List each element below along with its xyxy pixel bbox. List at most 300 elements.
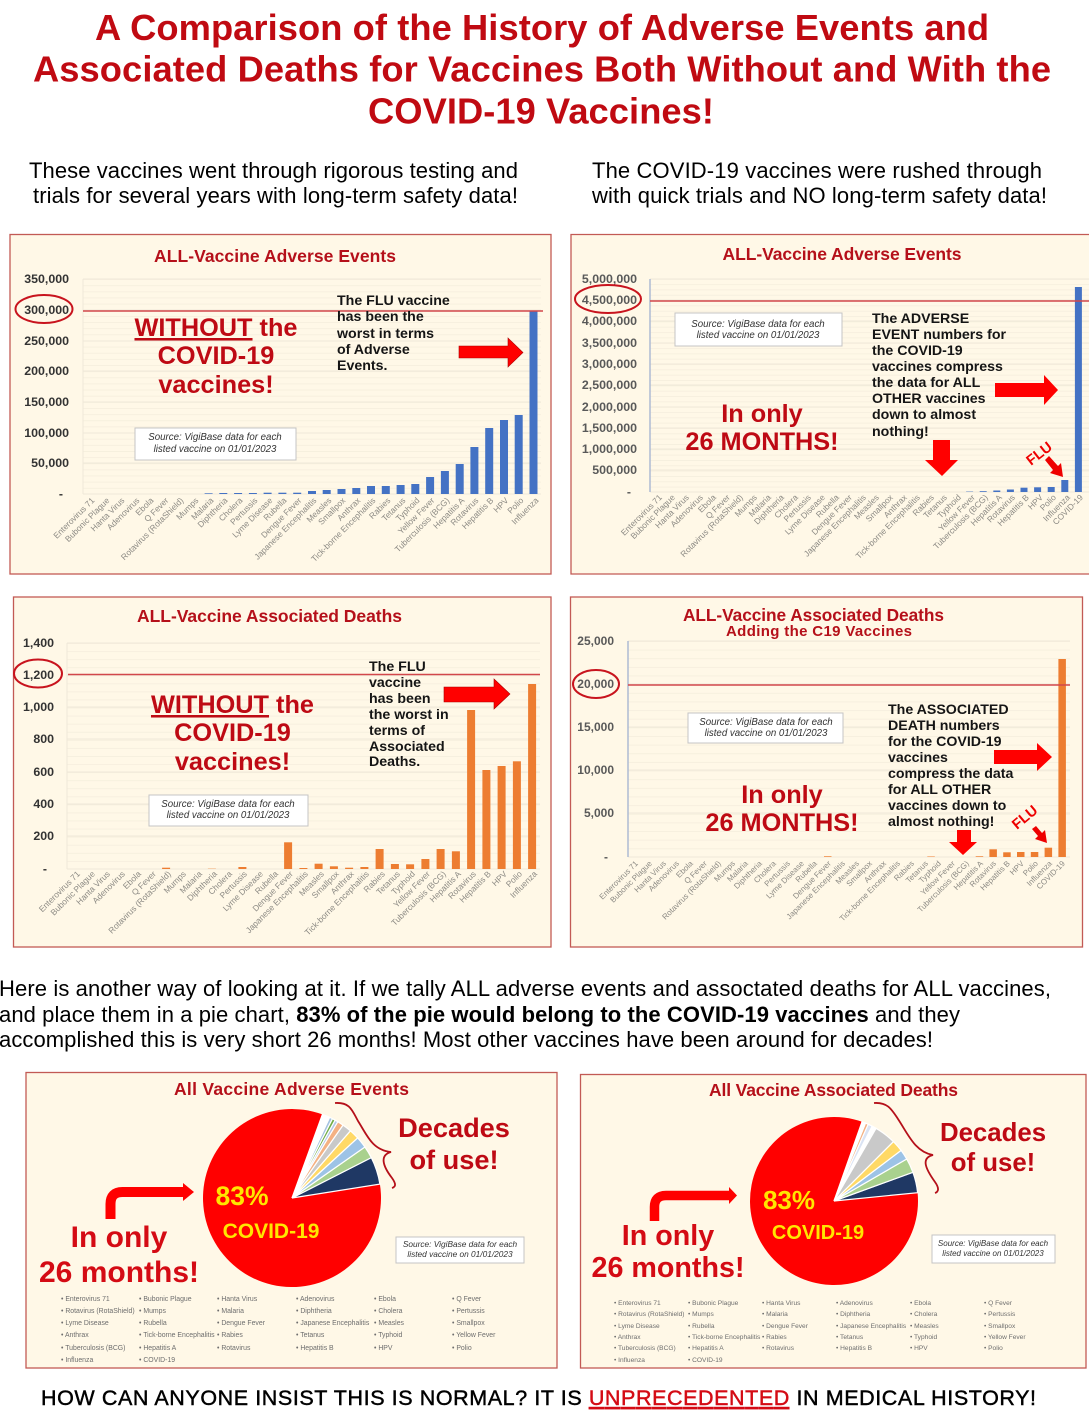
category labels: Hepatitis A — [969, 492, 1004, 528]
brace — [335, 1103, 395, 1188]
category labels: Polio — [1021, 859, 1040, 878]
category labels: Pertussis — [217, 869, 249, 900]
pie chart — [750, 1117, 918, 1285]
source box — [932, 1235, 1055, 1263]
circled 4,500,000 — [575, 285, 641, 313]
legend: • Diphtheria — [836, 1311, 871, 1318]
category labels: Dengue Fever — [791, 859, 833, 901]
panel: pie chart associated deaths — [580, 1074, 1086, 1368]
category labels: Lyme Disease — [764, 859, 806, 901]
title: COVID-19 Vaccines! — [368, 90, 714, 132]
category labels: COVID-19 — [1051, 492, 1085, 527]
legend: • Cholera — [374, 1308, 403, 1315]
category labels: Tetanus — [921, 492, 949, 520]
paragraph: another way of looking at it — [0, 976, 1051, 1052]
note: flu vaccine deaths: has been — [369, 691, 431, 707]
note: associated death numbers: compress the data — [888, 766, 1013, 782]
category labels: Typhoid — [394, 495, 422, 523]
legend: • Dengue Fever — [762, 1323, 809, 1330]
category labels: Hepatitis A — [428, 869, 463, 904]
legend: • Hanta Virus — [762, 1300, 801, 1307]
callout: in only 26 months: 26 months! — [39, 1256, 199, 1289]
callout: without COVID-19: vaccines! — [158, 371, 274, 399]
legend: • Yellow Fever — [452, 1332, 496, 1339]
category labels: Anthrax — [328, 868, 356, 896]
legend: • COVID-19 — [688, 1357, 723, 1364]
legend: • Hepatitis A — [688, 1345, 724, 1352]
category labels: Hepatitis B — [979, 859, 1012, 892]
category labels: Smallpox — [309, 868, 341, 900]
y axis labels: 1,500,000 — [582, 421, 637, 435]
legend: • Rabies — [217, 1332, 243, 1339]
y axis labels: - — [627, 485, 631, 499]
paragraph: another way of looking at it: Here is another way of looking at it. If we tally ALL adverse events and assoctated deaths for ALL vaccines, — [0, 976, 1051, 1001]
category labels: Malaria — [189, 495, 216, 522]
category labels: Ebola — [696, 492, 718, 515]
legend: • Pertussis — [452, 1308, 485, 1315]
y axis labels: 5,000 — [584, 806, 614, 820]
reference line at 20,000 — [628, 684, 1070, 686]
intro text: COVID-19 vaccines: The COVID-19 vaccines were rushed through — [592, 158, 1042, 183]
arrow: down to other vaccines — [925, 440, 958, 476]
category labels — [51, 495, 541, 564]
note: flu vaccine deaths — [369, 659, 449, 770]
category labels: Rotavirus (RotaShield) — [660, 859, 723, 922]
category labels: Measles — [852, 492, 881, 521]
legend: • Hepatitis A — [139, 1345, 177, 1352]
category labels: Measles — [304, 495, 333, 524]
y axis labels — [577, 634, 614, 864]
reference line at 300,000 — [83, 310, 543, 312]
intro text: other vaccines: These vaccines went through rigorous testing and — [29, 158, 518, 183]
chart heading: All Vaccine Associated Deaths — [709, 1080, 958, 1100]
category labels: HPV — [1008, 859, 1026, 877]
legend: • Rabies — [762, 1334, 787, 1341]
category labels: Mumps — [174, 495, 200, 522]
note: associated death numbers: vaccines — [888, 750, 948, 766]
category labels: Cholera — [217, 495, 245, 523]
y axis labels: 20,000 — [577, 677, 614, 691]
category labels: Influenza — [1041, 492, 1072, 523]
legend: • Anthrax — [61, 1332, 89, 1339]
chart heading: Adding the C19 Vaccines — [726, 623, 912, 640]
y axis labels: 4,500,000 — [582, 293, 637, 307]
legend: • Malaria — [762, 1311, 788, 1318]
legend: • Tetanus — [296, 1332, 325, 1339]
source box: Source: VigiBase data for each — [691, 319, 825, 330]
category labels: Diphtheria — [185, 869, 219, 903]
category labels — [619, 492, 1085, 561]
note: associated death numbers — [888, 702, 1013, 830]
legend: • COVID-19 — [139, 1357, 175, 1364]
category labels: Tuberculosis (BCG) — [393, 495, 452, 554]
callout: in only 26 months: In only — [721, 400, 803, 428]
legend: • Polio — [452, 1345, 472, 1352]
legend: • Typhoid — [374, 1332, 403, 1339]
bar chart: adverse events — [205, 311, 538, 494]
y axis labels: 150,000 — [24, 395, 69, 409]
y axis labels: 100,000 — [24, 426, 69, 440]
category labels: Measles — [834, 859, 861, 886]
y axis labels: 600 — [33, 765, 54, 779]
legend: • Anthrax — [614, 1334, 641, 1341]
reference line at 1,200 — [68, 674, 540, 676]
title: A Comparison of the History of Adverse Events and — [95, 7, 989, 48]
category labels: Mumps — [732, 492, 759, 519]
y axis labels: 1,400 — [23, 636, 54, 650]
grid — [67, 643, 540, 869]
y axis labels: 25,000 — [577, 634, 614, 648]
callout: without COVID-19: WITHOUT the — [134, 314, 298, 342]
category labels: Tuberculosis (BCG) — [931, 492, 990, 551]
y axis labels: - — [43, 862, 47, 876]
category labels: Rubella — [794, 859, 819, 884]
category labels: HPV — [1026, 492, 1045, 512]
note: flu vaccine deaths: the worst in — [369, 707, 449, 723]
note: adverse event numbers: OTHER vaccines — [872, 391, 986, 407]
category labels: Bubonic Plague — [628, 492, 677, 541]
legend: • Lyme Disease — [614, 1323, 660, 1330]
callout: in only 26 months: In only — [71, 1221, 168, 1254]
category labels: Diphtheria — [195, 495, 230, 529]
callout: decades of use: of use! — [951, 1149, 1035, 1177]
chart heading: ALL-Vaccine Adverse Events — [154, 246, 396, 266]
callout: without COVID-19 — [134, 314, 298, 399]
legend: • Adenovirus — [836, 1300, 873, 1307]
legend: • Dengue Fever — [217, 1320, 266, 1327]
grid — [628, 641, 1070, 857]
note: flu vaccine deaths: Deaths. — [369, 754, 420, 770]
category labels: Rubella — [814, 492, 841, 520]
category labels: Pertussis — [763, 859, 792, 888]
category labels: Q Fever — [142, 495, 171, 524]
category labels: Ebola — [674, 859, 695, 880]
category labels: Tick-borne Encephalitis — [838, 859, 902, 923]
category labels: Polio — [504, 869, 524, 889]
note: associated death numbers: DEATH numbers — [888, 718, 1000, 734]
y axis labels: 3,500,000 — [582, 336, 637, 350]
category labels: Japanese Encephalitis — [244, 869, 310, 935]
note: associated death numbers: vaccines down to — [888, 798, 1007, 814]
legend: • Enterovirus 71 — [614, 1300, 661, 1307]
source box: Source: VigiBase data for each — [148, 432, 282, 443]
note: adverse event numbers: vaccines compress — [872, 359, 1003, 375]
legend: • Q Fever — [452, 1296, 482, 1303]
source box — [135, 428, 296, 460]
bent arrow to pie — [654, 1187, 737, 1221]
legend: • Adenovirus — [296, 1296, 335, 1303]
note: flu vaccine: worst in terms — [336, 326, 434, 342]
category labels: Anthrax — [862, 859, 888, 885]
callout: in only 26 months: 26 MONTHS! — [685, 428, 839, 456]
source box — [688, 713, 843, 743]
source box — [396, 1237, 524, 1263]
category labels: Polio — [505, 495, 526, 516]
y axis labels: 50,000 — [31, 456, 69, 470]
note: flu vaccine: has been the — [337, 309, 424, 325]
legend: • Enterovirus 71 — [61, 1296, 110, 1303]
y axis labels: 200 — [33, 829, 54, 843]
legend: • Japanese Encephalitis — [296, 1320, 370, 1327]
callout: in only 26 months — [705, 781, 859, 837]
legend: • Diphtheria — [296, 1308, 332, 1315]
y axis labels: 5,000,000 — [582, 272, 637, 286]
legend: • Mumps — [139, 1308, 166, 1315]
category labels: Cholera — [772, 492, 800, 520]
y axis labels: 250,000 — [24, 334, 69, 348]
y axis labels: 1,000,000 — [582, 442, 637, 456]
y axis labels: 10,000 — [577, 763, 614, 777]
source box: Source: VigiBase data for each — [161, 799, 295, 810]
category labels: Dengue Fever — [809, 492, 854, 537]
category labels: Tetanus — [904, 859, 930, 885]
category labels: Rotavirus (RotaShield) — [678, 492, 745, 559]
category labels: Smallpox — [316, 495, 348, 527]
pie label: COVID-19: COVID-19 — [223, 1220, 319, 1243]
panel: associated deaths with COVID-19 — [570, 597, 1082, 947]
source box: Source: VigiBase data for each — [938, 1239, 1049, 1248]
pie label: 83%: 83% — [763, 1185, 815, 1215]
note: adverse event numbers: the COVID-19 — [872, 343, 963, 359]
source box — [149, 795, 308, 826]
category labels — [37, 868, 539, 937]
category labels: Polio — [1038, 492, 1058, 513]
y axis labels: 2,500,000 — [582, 378, 637, 392]
legend: • HPV — [374, 1345, 393, 1352]
category labels: Tick-borne Encephalitis — [303, 869, 371, 937]
category labels: Rubella — [261, 495, 289, 523]
category labels: Anthrax — [335, 495, 363, 523]
legend: • Yellow Fever — [984, 1334, 1026, 1341]
category labels: Rotavirus (RotaShield) — [106, 869, 173, 935]
category labels: Hanta Virus — [632, 859, 668, 894]
y axis labels: 400 — [33, 797, 54, 811]
panel: pie chart adverse events — [26, 1072, 557, 1368]
pie chart — [203, 1109, 381, 1287]
category labels: Tuberculosis (BCG) — [389, 869, 448, 928]
callout: decades of use: Decades — [398, 1112, 510, 1143]
category labels: Adenovirus — [90, 869, 127, 906]
pie label: COVID-19: COVID-19 — [772, 1222, 864, 1244]
category labels: Yellow Fever — [391, 869, 432, 910]
y axis labels: 350,000 — [24, 272, 69, 286]
bar chart: associated deaths with COVID-19 — [824, 659, 1066, 857]
category labels: Rabies — [892, 859, 916, 883]
note: flu vaccine: of Adverse — [337, 342, 410, 358]
arrow: right to influenza — [444, 679, 510, 709]
legend: • Rotavirus — [217, 1345, 251, 1352]
legend — [614, 1300, 1026, 1364]
note: flu vaccine: The FLU vaccine — [337, 293, 450, 309]
category labels: Japanese Encephalitis — [785, 859, 847, 921]
source box: Source: VigiBase data for each — [403, 1239, 518, 1249]
category labels: Pertussis — [781, 492, 813, 524]
circled 20,000 — [573, 670, 619, 698]
category labels: Diphtheria — [752, 492, 786, 526]
note: flu vaccine deaths: terms of — [369, 723, 425, 739]
y axis labels: - — [59, 487, 63, 501]
legend: • Rotavirus (RotaShield) — [61, 1308, 135, 1315]
arrow: right to COVID-19 bar — [995, 375, 1058, 405]
source box: listed vaccine on 01/01/2023 — [697, 330, 820, 341]
category labels: Rotavirus — [985, 492, 1017, 524]
note: flu vaccine deaths: Associated — [369, 739, 445, 755]
circled 1,200 — [14, 660, 62, 688]
category labels: Influenza — [1025, 859, 1054, 888]
category labels: Yellow Fever — [396, 495, 437, 536]
callout: in only 26 months: In only — [622, 1220, 714, 1252]
category labels: Tick-borne Encephalitis — [309, 495, 377, 564]
note: associated death numbers: The ASSOCIATED — [888, 702, 1009, 718]
intro text: other vaccines: trials for several years with long-term safety data! — [33, 183, 518, 208]
callout: decades of use — [940, 1119, 1046, 1177]
callout: in only 26 months: 26 months! — [591, 1252, 745, 1284]
callout: decades of use: of use! — [409, 1144, 499, 1175]
legend: • HPV — [910, 1345, 928, 1352]
category labels: Rabies — [361, 869, 387, 894]
legend: • Smallpox — [452, 1320, 485, 1327]
y axis labels: 500,000 — [592, 463, 637, 477]
legend: • Polio — [984, 1345, 1003, 1352]
category labels: Adenovirus — [105, 495, 141, 532]
chart heading: ALL-Vaccine Associated Deaths — [137, 606, 402, 626]
legend: • Japanese Encephalitis — [836, 1323, 907, 1330]
category labels: Hanta Virus — [74, 869, 112, 907]
category labels: Cholera — [206, 869, 234, 897]
legend: • Q Fever — [984, 1300, 1013, 1307]
legend: • Influenza — [614, 1357, 645, 1364]
panel: adverse events without COVID-19 — [10, 234, 551, 574]
legend: • Tick-borne Encephalitis — [688, 1334, 761, 1341]
bar chart: associated deaths — [162, 684, 536, 869]
legend: • Rubella — [688, 1323, 715, 1330]
note: associated death numbers: for ALL OTHER — [888, 782, 991, 798]
category labels: Q Fever — [682, 859, 709, 886]
category labels: Dengue Fever — [250, 869, 295, 913]
category labels: Rotavirus — [446, 869, 478, 901]
title: Associated Deaths for Vaccines Both Without and With the — [33, 48, 1051, 90]
category labels: Typhoid — [389, 869, 417, 897]
note: associated death numbers: almost nothing! — [888, 814, 994, 830]
grid — [83, 279, 541, 494]
category labels: Anthrax — [881, 492, 909, 520]
category labels: Yellow Fever — [919, 859, 957, 897]
chart heading: ALL-Vaccine Adverse Events — [722, 244, 962, 264]
circled 300,000 — [16, 295, 72, 323]
pie label: 83%: 83% — [215, 1181, 269, 1211]
category labels: Q Fever — [703, 492, 732, 521]
arrow: flu bar — [1032, 826, 1047, 843]
paragraph: another way of looking at it: and place them in a pie chart, 83% of the pie would belong to the COVID-19 vaccines and they — [0, 1002, 960, 1027]
category labels: Japanese Encephalitis — [252, 495, 318, 562]
category labels: Enterovirus 71 — [598, 859, 640, 901]
y axis labels: 4,000,000 — [582, 314, 637, 328]
closing statement: HOW CAN ANYONE INSIST THIS IS NORMAL? IT IS UNPRECEDENTED IN MEDICAL HISTORY! — [41, 1386, 1036, 1410]
legend: • Smallpox — [984, 1323, 1016, 1330]
category labels: Rotavirus — [448, 495, 480, 527]
callout: in only 26 months: In only — [741, 781, 823, 809]
bar chart: adverse events with COVID-19 — [966, 287, 1082, 492]
source box: listed vaccine on 01/01/2023 — [705, 728, 828, 739]
legend: • Hepatitis B — [296, 1345, 334, 1352]
category labels: Typhoid — [917, 859, 943, 885]
legend: • Bubonic Plague — [139, 1296, 192, 1303]
category labels: Hepatitis A — [952, 859, 985, 892]
category labels: Hanta Virus — [89, 495, 126, 533]
category labels — [598, 859, 1067, 923]
category labels: Enterovirus 71 — [619, 492, 664, 538]
legend: • Pertussis — [984, 1311, 1016, 1318]
category labels: Lyme Disease — [783, 492, 827, 537]
legend: • Hanta Virus — [217, 1296, 258, 1303]
y axis labels: 3,000,000 — [582, 357, 637, 371]
callout: without COVID-19: COVID-19 — [174, 719, 291, 747]
arrow: down to other vaccines — [949, 830, 977, 855]
legend: • Typhoid — [910, 1334, 937, 1341]
category labels: Japanese Encephalitis — [802, 492, 868, 559]
legend: • Measles — [910, 1323, 939, 1330]
category labels: Hepatitis B — [460, 495, 496, 531]
panel: adverse events with COVID-19 — [571, 234, 1089, 574]
source box: listed vaccine on 01/01/2023 — [167, 810, 290, 821]
category labels: Rotavirus (RotaShield) — [119, 495, 186, 562]
legend: • Ebola — [374, 1296, 396, 1303]
intro text: COVID-19 vaccines — [591, 158, 1047, 208]
category labels: Hepatitis B — [457, 869, 493, 905]
legend: • Rotavirus — [762, 1345, 795, 1352]
note: flu vaccine deaths: The FLU — [369, 659, 426, 675]
y axis labels: 1,000 — [23, 700, 54, 714]
callout: without COVID-19: vaccines! — [175, 748, 290, 776]
note: flu vaccine: Events. — [337, 358, 387, 374]
callout: without COVID-19: WITHOUT the — [151, 691, 314, 719]
y axis labels — [24, 272, 69, 501]
category labels: Lyme Disease — [230, 495, 275, 540]
note: adverse event numbers: nothing! — [872, 424, 929, 440]
legend: • Tuberculosis (BCG) — [614, 1345, 676, 1352]
source box — [675, 313, 842, 346]
category labels: Hepatitis B — [995, 492, 1031, 528]
arrow: flu bar — [1045, 456, 1063, 477]
category labels: Malaria — [725, 859, 750, 884]
category labels: Lyme Disease — [221, 869, 265, 913]
source box: listed vaccine on 01/01/2023 — [154, 444, 277, 455]
category labels: Enterovirus 71 — [51, 495, 97, 541]
category labels: Adenovirus — [647, 859, 681, 893]
reference line at 4,500,000 — [650, 300, 1089, 302]
category labels: Typhoid — [935, 492, 963, 520]
bent arrow to pie — [110, 1183, 194, 1219]
category labels: Q Fever — [129, 869, 158, 897]
legend: • Tuberculosis (BCG) — [61, 1345, 125, 1352]
category labels: Smallpox — [863, 492, 895, 524]
legend — [61, 1296, 496, 1364]
note: associated death numbers: for the COVID-19 — [888, 734, 1002, 750]
callout: in only 26 months: 26 MONTHS! — [705, 809, 859, 837]
paragraph: another way of looking at it: accomplished this is very short 26 months! Most other vaccines have been around for decades! — [0, 1027, 933, 1052]
panel: associated deaths without COVID-19 — [14, 597, 551, 947]
legend: • Tetanus — [836, 1334, 864, 1341]
category labels: Rotavirus — [968, 859, 998, 889]
note: flu vaccine — [336, 293, 450, 374]
legend: • Ebola — [910, 1300, 931, 1307]
arrow: right to influenza — [459, 338, 523, 367]
callout: without COVID-19: COVID-19 — [158, 342, 274, 370]
note: adverse event numbers — [872, 311, 1006, 440]
chart heading: ALL-Vaccine Associated Deaths — [683, 605, 944, 625]
category labels: Diphtheria — [732, 859, 764, 891]
note: adverse event numbers: The ADVERSE — [872, 311, 969, 327]
